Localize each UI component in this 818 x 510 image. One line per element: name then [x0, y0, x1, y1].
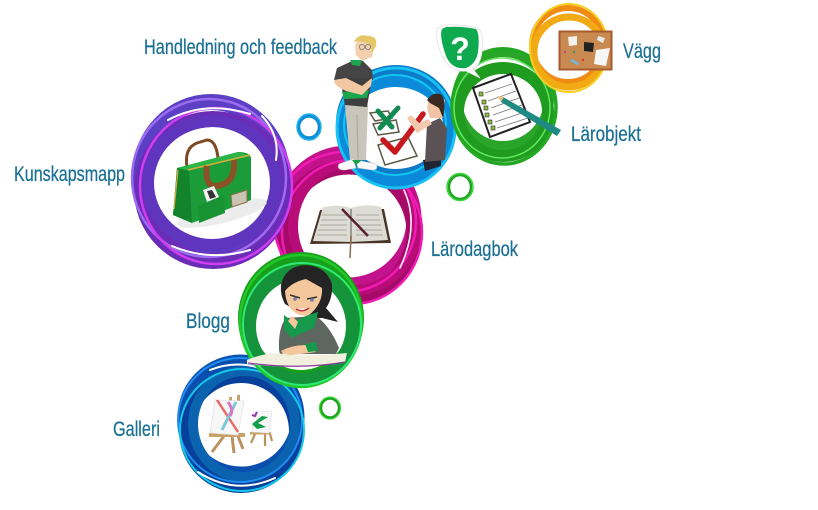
label: Kunskapsmapp: Kunskapsmapp — [14, 163, 125, 186]
icon: check boxes — [370, 108, 423, 165]
icon: open book — [310, 205, 391, 258]
label: Galleri: Galleri — [113, 418, 160, 441]
ring: Kunskapsmapp purple — [132, 99, 292, 264]
icon: checklist with pencil — [473, 74, 561, 137]
icon: question bubble: ? — [450, 31, 470, 67]
icon: woman reading — [247, 265, 347, 367]
icon: cork board — [560, 32, 612, 70]
icon: question bubble — [437, 25, 482, 78]
small ring: green lower — [320, 397, 340, 419]
label: Blogg: Blogg — [186, 310, 230, 333]
icon: standing man — [334, 35, 377, 170]
ring: Handledning blue — [337, 68, 455, 188]
small ring: blue — [297, 114, 321, 140]
ring: Blogg green — [240, 255, 362, 387]
ring: Lärodagbok magenta — [274, 152, 422, 304]
label: Lärodagbok: Lärodagbok — [431, 238, 518, 261]
label: Vägg: Vägg — [623, 40, 661, 63]
label: Lärobjekt: Lärobjekt — [571, 123, 641, 146]
ring: Vägg orange — [530, 4, 608, 92]
ring: Galleri blue — [178, 358, 304, 491]
label: Handledning och feedback: Handledning och feedback — [144, 36, 337, 59]
ring: Lärobjekt green — [452, 50, 556, 164]
small ring: green middle — [447, 174, 473, 200]
icon: green bag — [173, 140, 269, 234]
icon: seated man — [407, 94, 447, 171]
icon: easels — [209, 395, 272, 453]
